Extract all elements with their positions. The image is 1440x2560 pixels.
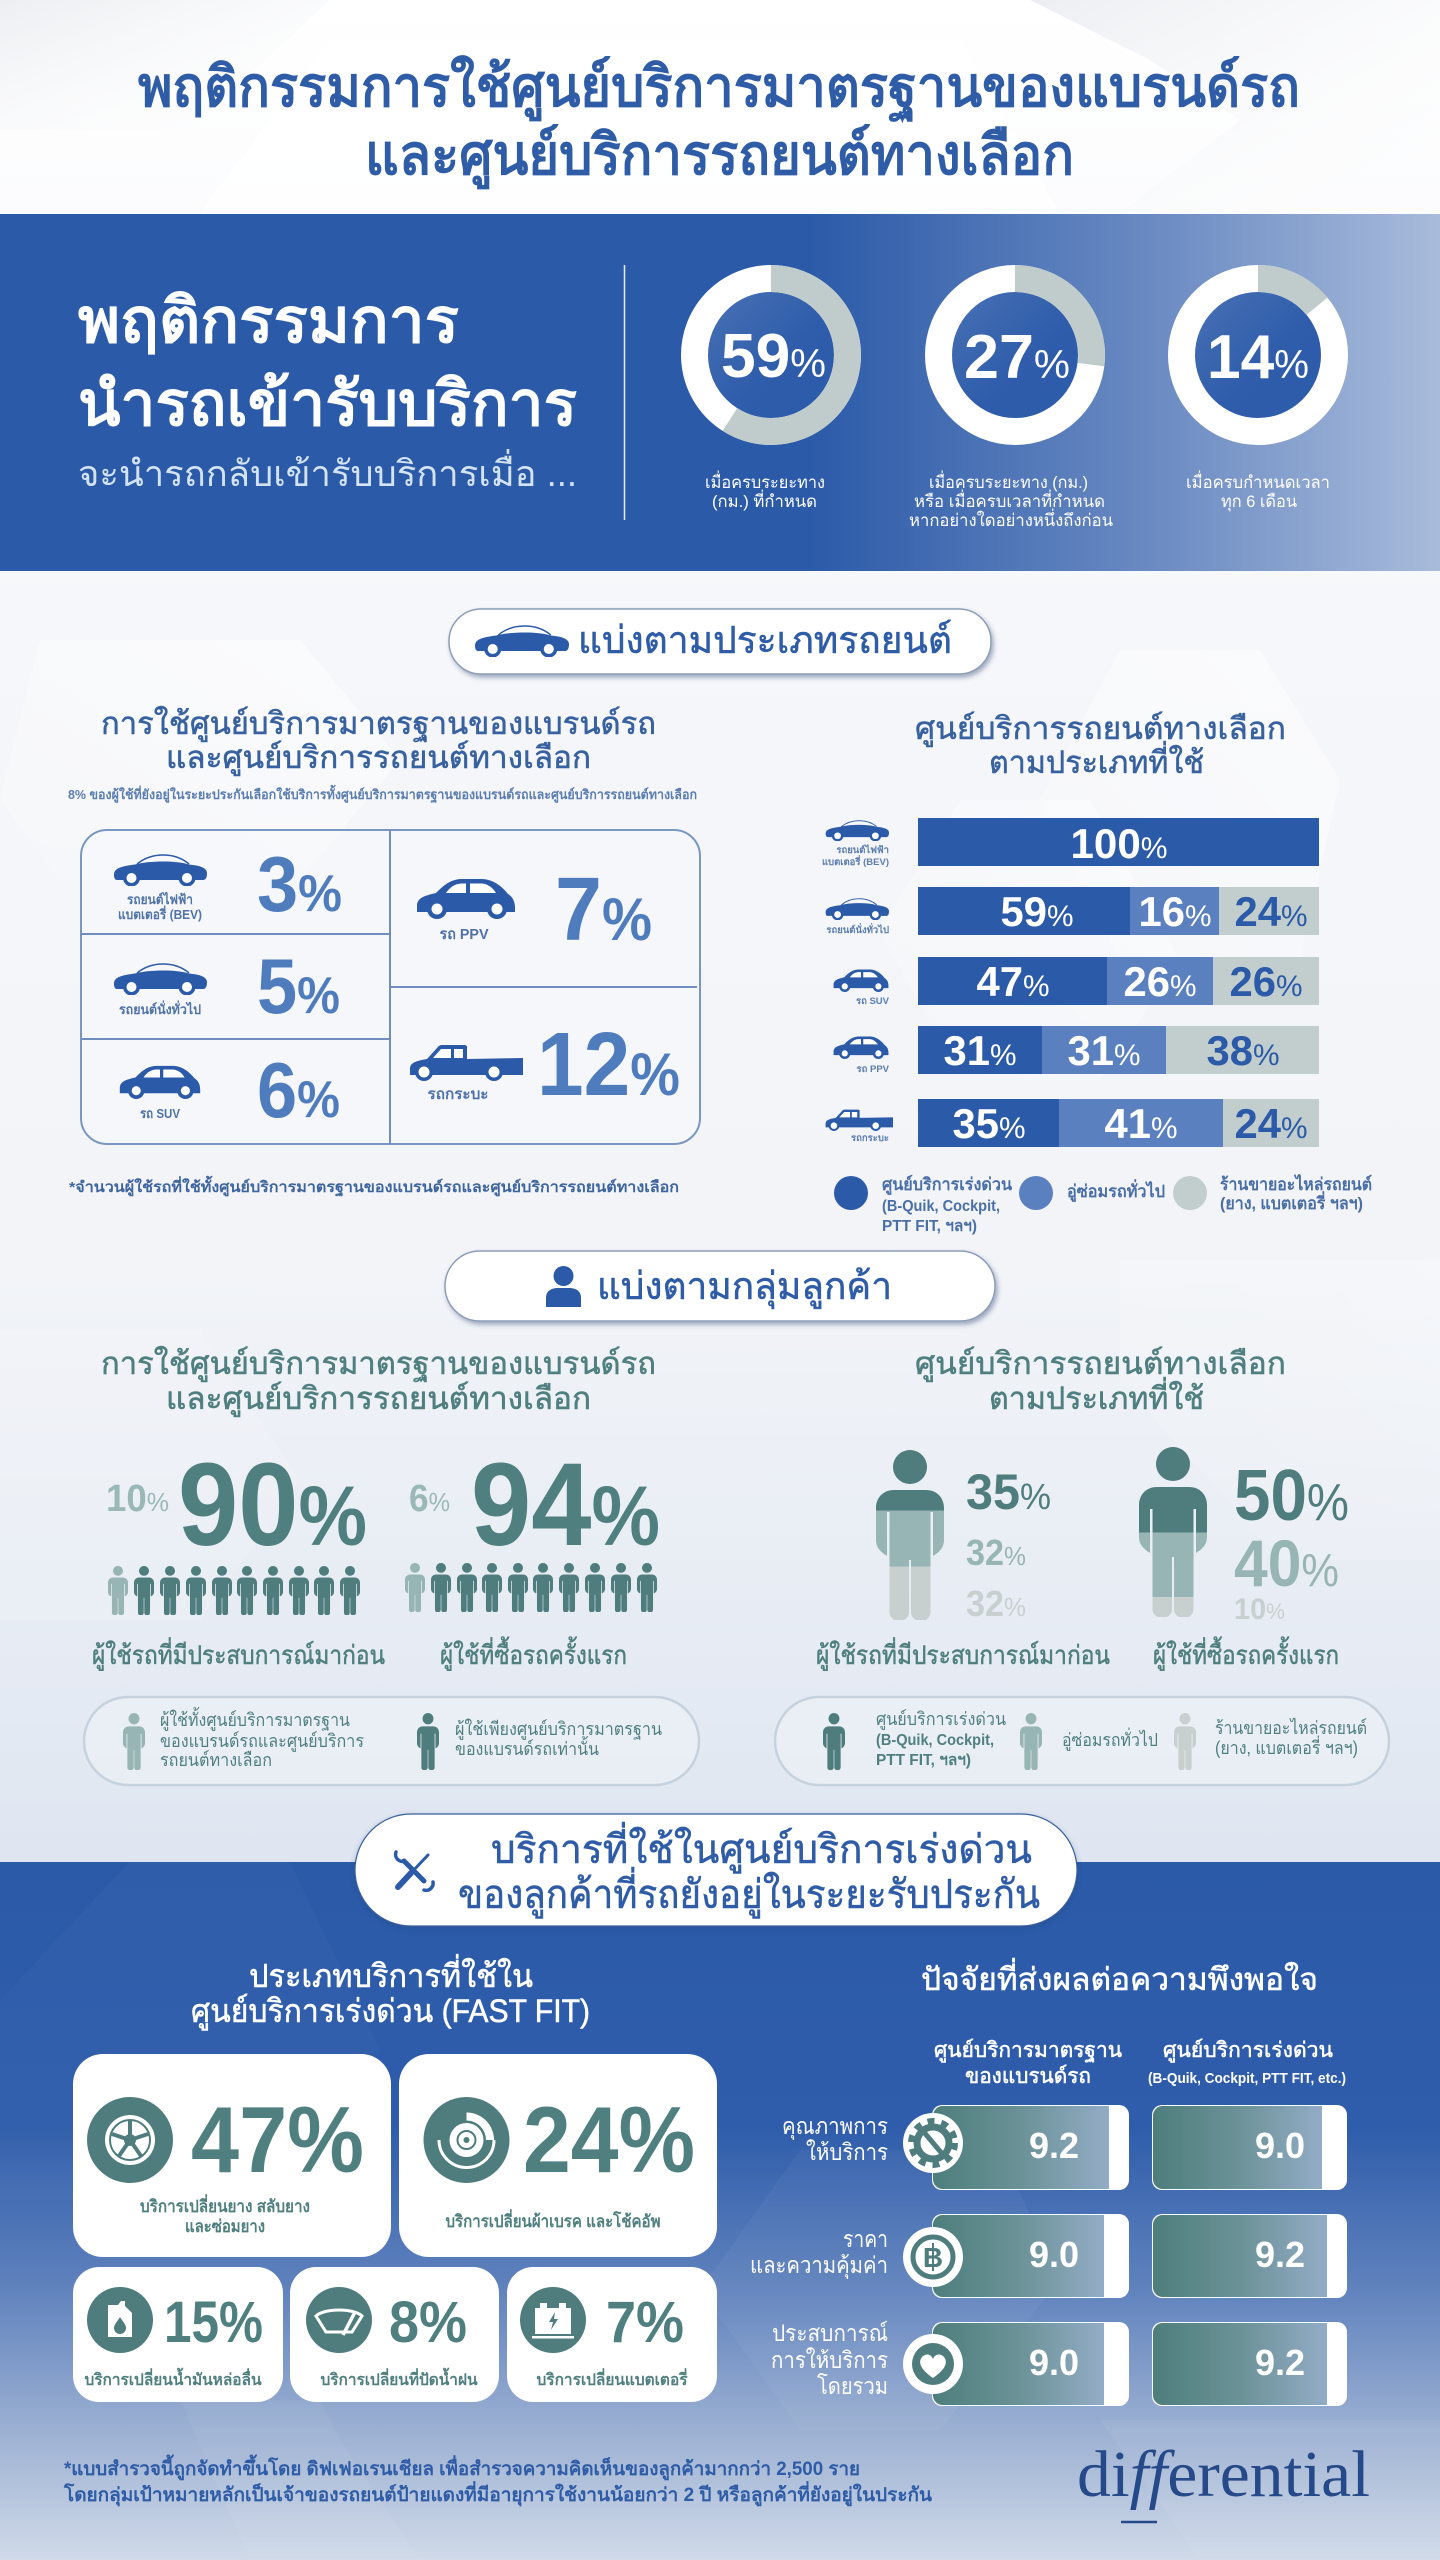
bar chart legend: ศูนย์บริการเร่งด่วน <box>882 1174 1012 1196</box>
figure: experienced users split: 32% <box>966 1532 1026 1573</box>
row: price: 9.2 <box>1255 2234 1305 2275</box>
donut captions: ทุก 6 เดือน <box>1221 492 1297 512</box>
row: sedan <box>826 887 1319 936</box>
heading: usage by customer: การใช้ศูนย์บริการมาตรฐานของแบรนด์รถ <box>101 1346 656 1382</box>
PPV cell: รถ PPV <box>440 926 488 943</box>
heading: alternative centres by car type <box>915 711 1286 780</box>
panel: blue lower section background <box>0 1862 1440 2560</box>
row: sedan: 59% <box>1000 888 1074 935</box>
card: tyres 47%: และซ่อมยาง <box>185 2217 265 2236</box>
card: tyres 47% <box>73 2054 391 2257</box>
card: engine oil 15%: บริการเปลี่ยนน้ำมันหล่อลื่น <box>84 2367 262 2389</box>
figure: experienced users split <box>816 1450 1110 1671</box>
card: battery 7% <box>507 2267 717 2402</box>
donut captions: เมื่อครบระยะทาง <box>705 470 825 492</box>
stacked bar chart <box>822 818 1319 1147</box>
row: price: 9.0 <box>1029 2234 1079 2275</box>
figure: first-time buyers split <box>1139 1447 1349 1671</box>
card: brakes 24% <box>399 2054 717 2257</box>
donut: 27%: 27% <box>964 323 1070 392</box>
note: 8 percent: 8% ของผู้ใช้ที่ยังอยู่ในระยะประกันเลือกใช้บริการทั้งศูนย์บริการมาตรฐานของแบรนด์รถและศูนย์บริการรถยนต์ทางเลือก <box>68 784 697 804</box>
logo: differential: differential <box>1077 2438 1370 2511</box>
bar chart legend: (B-Quik, Cockpit, <box>882 1198 1000 1215</box>
row: SUV: รถ SUV <box>856 996 890 1007</box>
legend pill: centre types: ร้านขายอะไหล่รถยนต์ <box>1215 1717 1367 1738</box>
card: brakes 24%: บริการเปลี่ยนผ้าเบรค และโช้คอัพ <box>446 2209 660 2231</box>
stat: experienced users: 90% <box>178 1439 367 1571</box>
row: overall experience: การให้บริการ <box>771 2347 888 2373</box>
row: service quality <box>782 2105 1347 2190</box>
stat: experienced users <box>92 1439 385 1671</box>
legend pill: centre types: (ยาง, แบตเตอรี่ ฯลฯ) <box>1215 1735 1358 1758</box>
figure: experienced users split: ผู้ใช้รถที่มีประสบการณ์มาก่อน <box>816 1637 1110 1671</box>
pickup cell <box>410 1015 680 1115</box>
PPV cell <box>417 860 652 960</box>
row: sedan: 24% <box>1234 888 1308 935</box>
donut: 59%: 59% <box>721 322 826 391</box>
figure: first-time buyers split: ผู้ใช้ที่ซื้อรถครั้งแรก <box>1153 1636 1339 1671</box>
row: BEV: แบตเตอรี่ (BEV) <box>822 854 889 868</box>
card: wipers 8%: 8% <box>389 2290 467 2355</box>
row: pickup: 24% <box>1234 1100 1308 1147</box>
icon: brake disc <box>424 2097 510 2183</box>
legend pill: centre types: (B-Quik, Cockpit, <box>876 1732 994 1749</box>
row: service quality: ให้บริการ <box>806 2139 888 2165</box>
column headers: ศูนย์บริการเร่งด่วน <box>1163 2038 1333 2063</box>
bar chart legend: (ยาง, แบตเตอรี่ ฯลฯ) <box>1220 1191 1363 1213</box>
stat: first-time buyers: 6% <box>409 1478 450 1520</box>
pickup cell: 12% <box>537 1015 680 1115</box>
heading: fast fit service types <box>191 1954 590 2031</box>
sedan cell: 5% <box>257 942 340 1030</box>
row: overall experience: 9.0 <box>1029 2342 1079 2383</box>
icon: baht coin: B <box>923 2242 943 2273</box>
row: BEV <box>822 818 1319 868</box>
card: engine oil 15%: 15% <box>164 2290 263 2355</box>
donut: 27% <box>938 278 1092 432</box>
legend pill: user types: ของแบรนด์รถเท่านั้น <box>455 1736 599 1759</box>
pickup cell: รถกระบะ <box>428 1086 488 1103</box>
heading: fast fit service types: ศูนย์บริการเร่งด่วน (FAST FIT) <box>191 1993 590 2031</box>
donut captions: หรือ เมื่อครบเวลาที่กำหนด <box>914 489 1105 511</box>
icon: gear <box>903 2113 963 2173</box>
donut captions: เมื่อครบระยะทาง (กม.) <box>929 470 1088 492</box>
PPV cell: 7% <box>555 860 652 960</box>
donut captions <box>705 470 1330 530</box>
card: brakes 24%: 24% <box>523 2087 695 2192</box>
row: overall experience: ประสบการณ์ <box>772 2320 888 2346</box>
card: wipers 8% <box>290 2267 499 2402</box>
heading: usage by customer <box>101 1346 656 1417</box>
donut: 59% <box>694 278 848 432</box>
row: PPV: 31% <box>1068 1027 1140 1074</box>
heading: alternative centres by customer: ศูนย์บริการรถยนต์ทางเลือก <box>915 1346 1286 1382</box>
row: price: และความคุ้มค่า <box>750 2252 888 2279</box>
band heading: พฤติกรรมการ <box>78 287 459 356</box>
sedan cell <box>114 942 340 1030</box>
sedan cell: รถยนต์นั่งทั่วไป <box>119 1000 201 1017</box>
card: engine oil 15% <box>73 2267 283 2402</box>
row: price <box>750 2214 1347 2298</box>
stat: first-time buyers: ผู้ใช้ที่ซื้อรถครั้งแรก <box>440 1636 627 1671</box>
legend pill: centre types: ศูนย์บริการเร่งด่วน <box>876 1709 1006 1730</box>
row: BEV: รถยนต์ไฟฟ้า <box>836 844 889 856</box>
row: SUV <box>834 957 1319 1007</box>
section pill: fast fit services: บริการที่ใช้ในศูนย์บริการเร่งด่วน <box>491 1822 1032 1873</box>
BEV cell <box>114 840 342 928</box>
panel: car type table <box>81 830 700 1144</box>
satisfaction scores <box>750 2105 1347 2406</box>
figure: first-time buyers split: 40% <box>1234 1526 1339 1600</box>
row: SUV: 47% <box>976 958 1050 1005</box>
row: service quality: 9.2 <box>1029 2125 1079 2166</box>
figure: experienced users split: 35% <box>966 1464 1051 1520</box>
survey footnote: *แบบสำรวจนี้ถูกจัดทำขึ้นโดย ดิฟเฟอเรนเชียล เพื่อสำรวจความคิดเห็นของลูกค้ามากกว่า 2,500 ราย <box>64 2454 860 2481</box>
row: pickup: 35% <box>952 1100 1026 1147</box>
heading: alternative centres by car type: ศูนย์บริการรถยนต์ทางเลือก <box>915 711 1286 747</box>
card: tyres 47%: 47% <box>191 2087 364 2192</box>
donut: 14% <box>1182 278 1334 432</box>
heading: alternative centres by car type: ตามประเภทที่ใช้ <box>989 741 1204 780</box>
row: PPV <box>834 1026 1319 1075</box>
row: pickup: 41% <box>1104 1100 1178 1147</box>
heading: usage by car type <box>101 706 656 776</box>
band heading <box>78 287 577 494</box>
panel: service behaviour band <box>0 214 1440 571</box>
row: SUV: 26% <box>1230 958 1302 1005</box>
heading: usage by customer: และศูนย์บริการรถยนต์ทางเลือก <box>166 1381 591 1417</box>
bar chart legend: อู่ซ่อมรถทั่วไป <box>1067 1179 1165 1203</box>
row: pickup: รถกระบะ <box>851 1133 889 1144</box>
card: tyres 47%: บริการเปลี่ยนยาง สลับยาง <box>140 2194 310 2216</box>
SUV cell <box>120 1046 340 1134</box>
legend pill: centre types: PTT FIT, ฯลฯ) <box>876 1752 971 1769</box>
bar chart legend <box>834 1174 1372 1235</box>
legend pill: centre types <box>775 1697 1389 1785</box>
donut: 14%: 14% <box>1207 323 1309 392</box>
page background <box>0 0 1440 1862</box>
bar chart legend: ร้านขายอะไหล่รถยนต์ <box>1220 1174 1372 1194</box>
icon: tyre <box>87 2097 173 2183</box>
row: overall experience: โดยรวม <box>817 2373 888 2399</box>
card: wipers 8%: บริการเปลี่ยนที่ปัดน้ำฝน <box>320 2367 478 2389</box>
section pill: fast fit services: ของลูกค้าที่รถยังอยู่ในระยะรับประกัน <box>458 1867 1040 1918</box>
column headers: (B-Quik, Cockpit, PTT FIT, etc.) <box>1148 2070 1346 2087</box>
footnote: car table: *จำนวนผู้ใช้รถที่ใช้ทั้งศูนย์บริการมาตรฐานของแบรนด์รถและศูนย์บริการรถยนต์ทางเลือก <box>69 1175 679 1197</box>
legend pill: centre types: อู่ซ่อมรถทั่วไป <box>1062 1727 1158 1751</box>
icon: oil jug <box>87 2287 153 2353</box>
band heading: จะนำรถกลับเข้ารับบริการเมื่อ ... <box>78 449 577 494</box>
bar chart legend: PTT FIT, ฯลฯ) <box>882 1218 977 1235</box>
icon: windscreen wiper <box>306 2287 372 2353</box>
section pill: by car type: แบ่งตามประเภทรถยนต์ <box>578 619 952 662</box>
figure: first-time buyers split: 50% <box>1234 1456 1349 1536</box>
icon: wrench and screwdriver <box>396 1852 433 1890</box>
row: BEV: 100% <box>1070 820 1168 867</box>
main title <box>138 54 1300 190</box>
row: sedan: รถยนต์นั่งทั่วไป <box>826 922 889 936</box>
BEV cell: แบตเตอรี่ (BEV) <box>118 905 202 922</box>
row: overall experience <box>771 2320 1347 2406</box>
section pill: by customer group: แบ่งตามกลุ่มลูกค้า <box>597 1266 892 1309</box>
donut captions: เมื่อครบกำหนดเวลา <box>1186 470 1330 492</box>
heading: alternative centres by customer <box>915 1346 1286 1416</box>
icon: car <box>475 626 569 658</box>
icon: battery <box>520 2287 586 2353</box>
SUV cell: รถ SUV <box>140 1106 180 1121</box>
row: PPV: 38% <box>1206 1027 1280 1074</box>
column headers: ศูนย์บริการมาตรฐาน <box>934 2038 1122 2063</box>
section pill: by car type <box>449 609 991 674</box>
main title: พฤติกรรมการใช้ศูนย์บริการมาตรฐานของแบรนด์รถ <box>138 54 1300 123</box>
donut captions: (กม.) ที่กำหนด <box>712 489 817 511</box>
row: service quality: 9.0 <box>1255 2125 1305 2166</box>
section pill: fast fit services <box>355 1814 1077 1926</box>
people row: 10 figures <box>108 1566 360 1615</box>
background hexagon pattern <box>0 0 1440 1620</box>
legend pill: user types: รถยนต์ทางเลือก <box>160 1750 272 1770</box>
donut captions: หากอย่างใดอย่างหนึ่งถึงก่อน <box>909 508 1113 530</box>
legend pill: user types <box>84 1697 699 1785</box>
legend pill: user types: ผู้ใช้ทั้งศูนย์บริการมาตรฐาน <box>160 1707 350 1731</box>
survey footnote: โดยกลุ่มเป้าหมายหลักเป็นเจ้าของรถยนต์ป้ายแดงที่มีอายุการใช้งานน้อยกว่า 2 ปี หรือลูกค้าที่ยังอยู่ในประกัน <box>63 2481 932 2507</box>
people row: 10 figures <box>405 1563 657 1612</box>
BEV cell: รถยนต์ไฟฟ้า <box>127 891 193 907</box>
heading: usage by car type: และศูนย์บริการรถยนต์ทางเลือก <box>166 740 591 776</box>
heading: alternative centres by customer: ตามประเภทที่ใช้ <box>989 1377 1204 1416</box>
stat: first-time buyers: 94% <box>471 1439 660 1571</box>
legend pill: user types: ผู้ใช้เพียงศูนย์บริการมาตรฐาน <box>455 1718 662 1740</box>
heading: satisfaction factors: ปัจจัยที่ส่งผลต่อความพึงพอใจ <box>921 1958 1318 1997</box>
stat: experienced users: 10% <box>106 1478 169 1520</box>
BEV cell: 3% <box>257 840 342 928</box>
icon: baht coin <box>903 2227 963 2287</box>
band heading: นำรถเข้ารับบริการ <box>78 370 577 439</box>
card: battery 7%: 7% <box>606 2290 684 2355</box>
row: service quality: คุณภาพการ <box>782 2113 888 2140</box>
stat: experienced users: ผู้ใช้รถที่มีประสบการณ์มาก่อน <box>92 1637 385 1671</box>
row: PPV: รถ PPV <box>856 1064 890 1075</box>
column headers <box>934 2038 1346 2088</box>
row: overall experience: 9.2 <box>1255 2342 1305 2383</box>
survey footnote <box>63 2454 932 2507</box>
figure: experienced users split: 32% <box>966 1583 1026 1624</box>
figure: first-time buyers split: 10% <box>1234 1593 1285 1626</box>
row: sedan: 16% <box>1138 888 1212 935</box>
column headers: ของแบรนด์รถ <box>965 2064 1091 2088</box>
row: PPV: 31% <box>944 1027 1016 1074</box>
icon: person bust <box>546 1266 581 1307</box>
SUV cell: 6% <box>257 1046 340 1134</box>
card: battery 7%: บริการเปลี่ยนแบตเตอรี่ <box>536 2368 688 2389</box>
heading: usage by car type: การใช้ศูนย์บริการมาตรฐานของแบรนด์รถ <box>101 706 656 742</box>
row: pickup <box>826 1099 1319 1147</box>
main title: และศูนย์บริการรถยนต์ทางเลือก <box>365 123 1074 190</box>
legend pill: user types: ของแบรนด์รถและศูนย์บริการ <box>160 1731 364 1752</box>
lower section hexagon pattern <box>0 1862 1440 2560</box>
section pill: by customer group <box>445 1251 995 1321</box>
row: price: ราคา <box>843 2226 888 2252</box>
icon: heart <box>903 2334 963 2394</box>
heading: fast fit service types: ประเภทบริการที่ใช้ใน <box>249 1954 533 1994</box>
stat: first-time buyers <box>405 1439 660 1671</box>
row: SUV: 26% <box>1124 958 1196 1005</box>
